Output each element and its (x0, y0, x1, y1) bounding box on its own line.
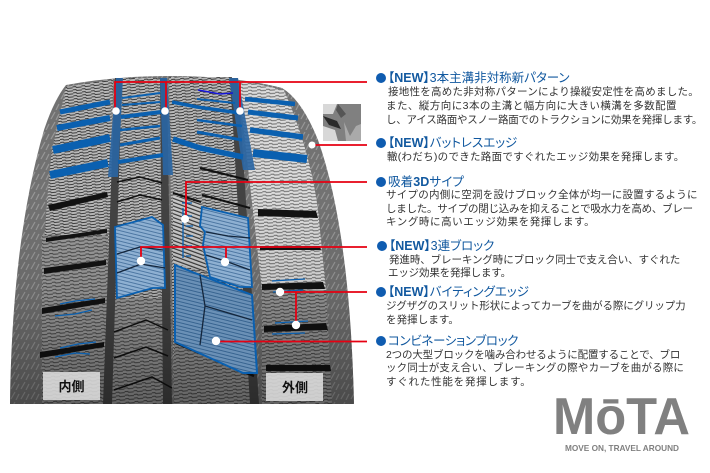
main grooves (103, 78, 259, 404)
MOTA logo: MOVE ON, TRAVEL AROUND (565, 443, 679, 453)
text block: triple block: エッジ効果を発揮します。 (388, 267, 511, 279)
label: outer side (266, 373, 323, 401)
text block: biting edge (376, 285, 686, 326)
label: inner side (43, 372, 100, 400)
text block: biting edge: 【NEW】バイティングエッジ (388, 285, 529, 299)
text block: combination block: コンビネーションブロック (388, 334, 518, 348)
text block: combination block: 2つの大型ブロックを噛み合わせるように配置することで、ブロ (386, 349, 680, 361)
text block: 3D sipe: しました。サイプの閉じ込みを抑えることで吸水力を高め、ブレー (386, 203, 693, 215)
text block: asymmetric pattern: し、アイス路面やスノー路面でのトラクションに効果を発揮します。 (386, 114, 702, 126)
text block: asymmetric pattern: 接地性を高めた非対称パターンにより操縦安定性を高めました。 (388, 86, 699, 98)
dashed blue siping (182, 203, 193, 258)
text block: combination block (376, 334, 684, 388)
text block: buttress edge: 轍(わだち)のできた路面ですぐれたエッジ効果を発揮します。 (387, 151, 685, 163)
text block: triple block: 発進時、ブレーキング時にブロック同士で支え合い、すぐれた (389, 254, 680, 266)
text block: buttress edge: 【NEW】バットレスエッジ (388, 136, 517, 150)
blue combination block (175, 265, 257, 373)
text block: asymmetric pattern (376, 71, 702, 126)
text block: biting edge: ジグザグのスリット形状によってカーブを曲がる際にグリップ力 (386, 300, 686, 312)
text block: triple block (377, 239, 680, 279)
block grooves (117, 232, 252, 345)
darkening shade (10, 76, 354, 404)
blue main groove highlights (108, 78, 255, 177)
text block: asymmetric pattern: 【NEW】3本主溝非対称新パターン (388, 71, 570, 85)
lateral grooves (40, 192, 331, 371)
text block: 3D sipe: サイプの内側に空洞を設けブロック全体が均一に設置するように (386, 189, 698, 201)
blue lateral grooves (50, 90, 308, 357)
blue triple block right (200, 207, 252, 287)
tire silhouette (10, 76, 354, 404)
tread ribs (42, 77, 332, 404)
text block: 3D sipe: 吸着3Dサイプ (388, 175, 464, 189)
text block: asymmetric pattern: また、縦方向に3本の主溝と幅方向に大きい横溝を多数配置 (386, 100, 677, 112)
text block: combination block: ック同士が支え合い、ブレーキングの際やカーブを曲がる際に (386, 362, 684, 374)
white callout dots (112, 107, 316, 345)
inset close-up of buttress (323, 104, 361, 141)
text block: 3D sipe (376, 175, 698, 228)
text block: biting edge: を発揮します。 (386, 314, 459, 326)
label: outer side: 外側 (282, 380, 308, 395)
rib chevron grooves (114, 168, 254, 390)
text block: combination block: すぐれた性能を発揮します。 (386, 376, 532, 388)
label: inner side: 内側 (58, 379, 85, 394)
MOTA logo: MōTA (553, 388, 690, 446)
text block: triple block: 【NEW】3連ブロック (389, 239, 494, 253)
text block: buttress edge (376, 136, 685, 163)
blue triple block left (115, 217, 165, 298)
text block: 3D sipe: キング時に高いエッジ効果を発揮します。 (386, 216, 595, 228)
red leader lines (115, 82, 367, 342)
